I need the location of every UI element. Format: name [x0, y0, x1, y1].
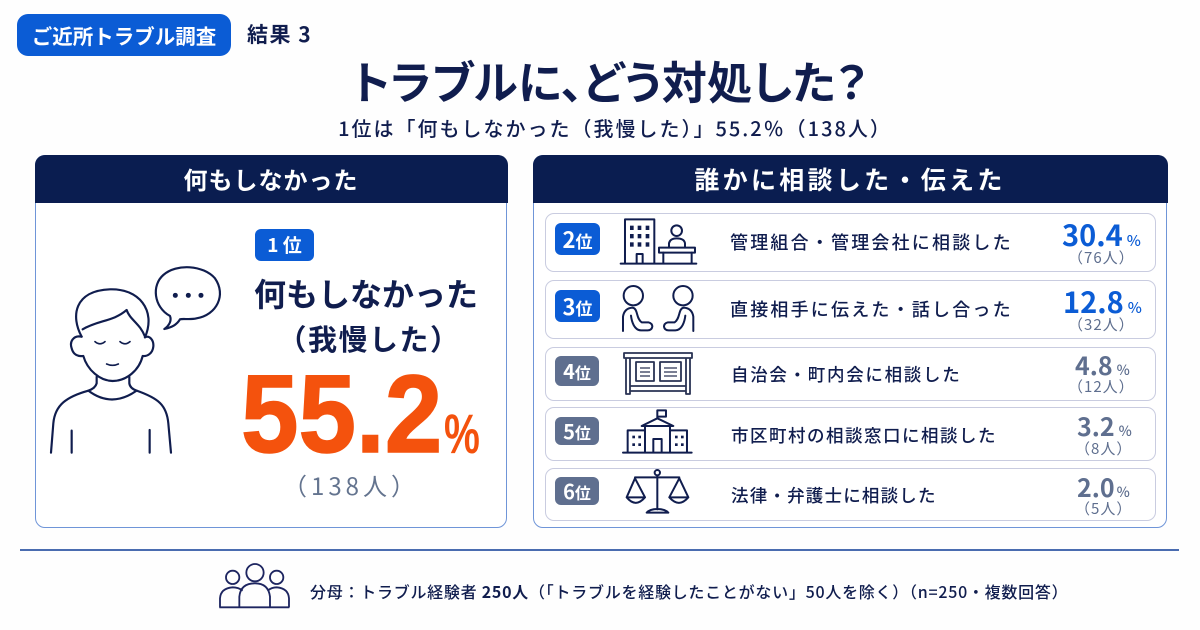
tag: survey name: ご近所トラブル調査 [32, 20, 216, 50]
row 2: rank 2 [545, 213, 1156, 272]
label rank 3: 直接相手に伝えた・話し合った [730, 296, 1013, 322]
rank badge 4: 4位 [563, 356, 591, 385]
row 3: rank 3 [545, 280, 1156, 339]
label rank 6: 法律・弁護士に相談した [731, 483, 937, 508]
value rank 6: 2.0% [1077, 469, 1130, 505]
rank badge 1 [255, 229, 314, 261]
panel heading: 誰かに相談した・伝えた [694, 160, 1006, 196]
panel: did nothing [35, 155, 507, 528]
count 138: （138人） [283, 467, 419, 502]
rank badge 5 [555, 417, 599, 445]
value rank 3: 12.8 % [1063, 280, 1142, 322]
count rank 4: （12人） [1068, 376, 1135, 397]
panel heading [34, 154, 508, 202]
count rank 3: （32人） [1068, 314, 1135, 335]
rank badge 1: 1 位 [267, 231, 302, 258]
tag: survey name [17, 14, 231, 56]
rank badge 3: 3位 [562, 290, 592, 322]
row 4: rank 4 [545, 347, 1156, 401]
subtitle: 1位は「何もしなかった（我慢した）」55.2％（138人） [338, 113, 892, 142]
label rank 4: 自治会・町内会に相談した [731, 362, 961, 387]
panel: consulted someone [533, 155, 1167, 528]
percent sign: % [444, 402, 480, 465]
rank badge 3 [555, 290, 600, 322]
count rank 5: （8人） [1075, 438, 1132, 459]
rank badge 6 [555, 477, 599, 505]
big percentage: 55.2 [241, 353, 442, 476]
panel heading: 何もしなかった [184, 160, 358, 196]
value rank 4: 4.8 % [1075, 347, 1130, 383]
panel heading [532, 154, 1168, 202]
rank badge 4 [555, 356, 599, 386]
rank badge 6: 6位 [563, 476, 591, 505]
label rank 5: 市区町村の相談窓口に相談した [731, 423, 997, 448]
label rank 2: 管理組合・管理会社に相談した [730, 229, 1013, 255]
label: did nothing: 何もしなかった [254, 270, 478, 316]
footer rule [20, 549, 1179, 551]
count rank 6: （5人） [1075, 498, 1132, 519]
rank badge 2 [555, 223, 600, 255]
label: endured: （我慢した） [277, 317, 460, 359]
row 5: rank 5 [545, 407, 1156, 461]
rank badge 2: 2位 [562, 223, 592, 255]
row 6: rank 6 [545, 468, 1156, 521]
count rank 2: （76人） [1068, 247, 1135, 268]
value rank 5: 3.2 % [1077, 408, 1132, 444]
rank badge 5: 5位 [563, 416, 591, 445]
title: トラブルに、どう対処した？ [352, 47, 868, 112]
footer note: 分母：トラブル経験者 250人（「トラブルを経験したことがない」50人を除く）（n=250・複数回答） [310, 579, 1068, 603]
value rank 2: 30.4 % [1062, 213, 1141, 255]
result number: 結果 3 [247, 19, 312, 49]
